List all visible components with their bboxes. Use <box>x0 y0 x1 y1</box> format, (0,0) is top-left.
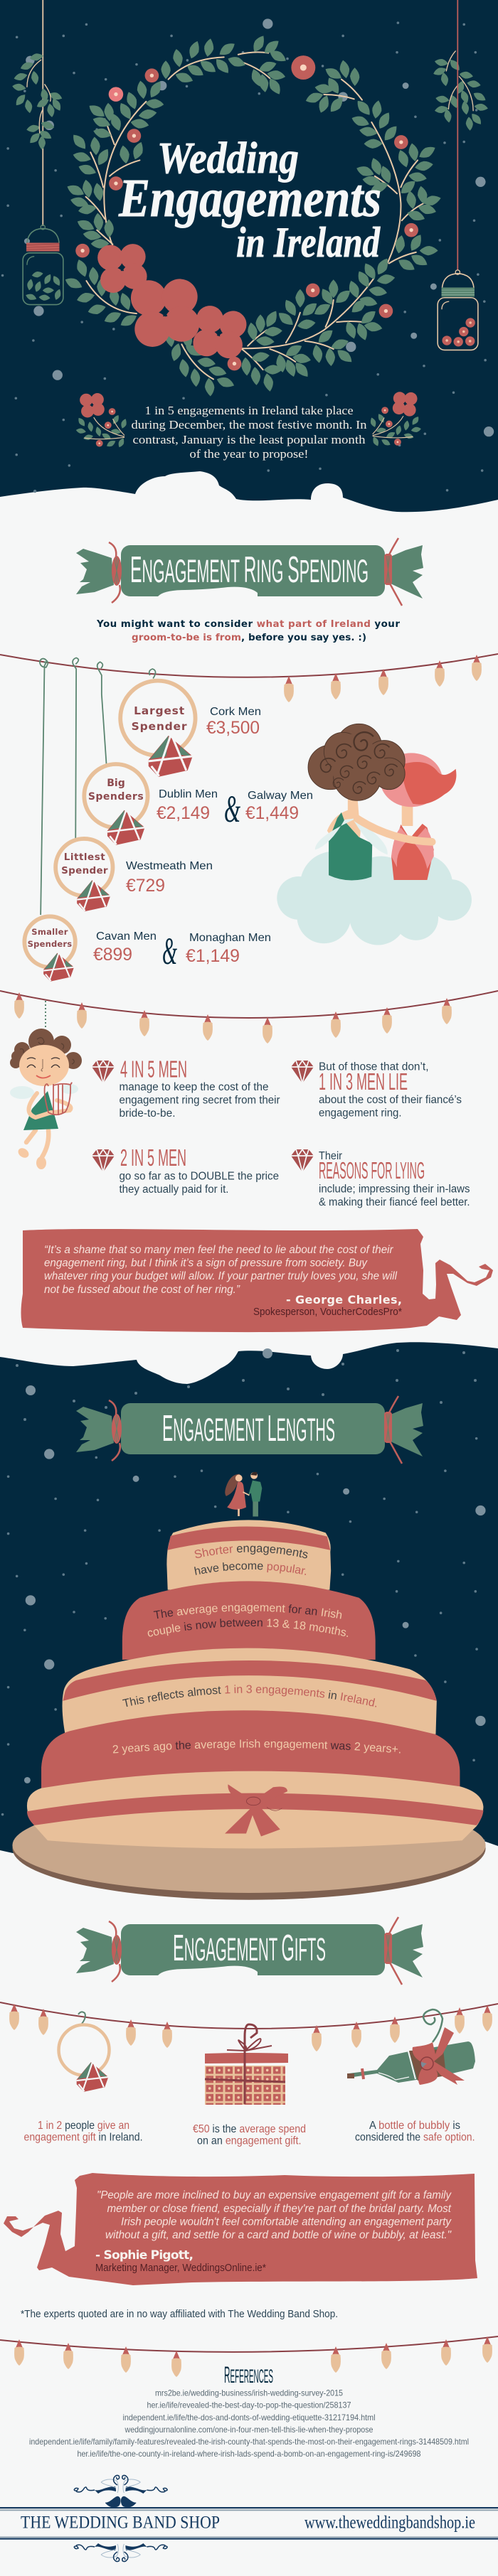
engagement gifts heading banner: ENGAGEMENT GIFTS <box>173 1928 326 1969</box>
string of lights: gifts <box>0 2002 498 2051</box>
spend figures: €729 <box>126 876 165 896</box>
spend figures: Galway Men <box>248 790 313 802</box>
snow dots: hero <box>1 18 494 493</box>
spend figures: Cavan Men <box>96 930 157 943</box>
snow dots: engagement lengths <box>1 1348 486 1842</box>
stat: 2 in 5 men: go so far as to DOUBLE the price <box>120 1170 279 1183</box>
tier labels <box>112 1545 401 1755</box>
engagement gifts heading banner <box>76 1917 423 1985</box>
stat: 4 in 5 men <box>92 1056 280 1120</box>
ring labels: Spender <box>132 720 187 733</box>
title: Wedding <box>157 134 299 183</box>
callout: George Charles quote <box>21 1229 493 1332</box>
ring labels: Largest <box>134 704 185 717</box>
right hanging jar with flowers <box>432 0 489 350</box>
ring labels: Littlest <box>64 852 105 863</box>
spend figures: Westmeath Men <box>126 860 213 872</box>
spend figures <box>93 706 313 972</box>
references: her.ie/life/revealed-the-best-day-to-pop-the-question/258137 <box>147 2400 351 2410</box>
chart: tiered wedding cake <box>12 1471 486 1900</box>
ring labels: Smaller <box>31 927 68 937</box>
spend figures: & <box>224 788 240 830</box>
callout: Sophie Pigott quote <box>4 2173 477 2285</box>
floral corner: intro right <box>369 392 421 447</box>
spend figures: & <box>162 930 177 972</box>
icon: gift box <box>205 2024 288 2105</box>
title: in Ireland <box>236 219 381 266</box>
stat: reasons for lying: include; impressing their in-laws <box>319 1183 470 1196</box>
ring labels: Spenders <box>88 791 144 803</box>
spend figures: Dublin Men <box>159 788 218 800</box>
ribbon bow <box>225 1784 287 1836</box>
engagement lengths heading banner <box>76 1396 423 1464</box>
cake board <box>12 1797 486 1900</box>
wreath with flowers <box>63 33 442 397</box>
ring labels: Spenders <box>28 939 72 949</box>
gift stat: 50 euro: on an engagement gift. <box>197 2135 302 2147</box>
callout: George Charles quote: - George Charles, <box>286 1293 402 1306</box>
tier labels: The average engagement for an Irish <box>154 1604 341 1619</box>
intro text: of the year to propose! <box>189 447 309 461</box>
gift stat: 50 euro: €50 is the average spend <box>193 2123 306 2135</box>
callout: Sophie Pigott quote: - Sophie Pigott, <box>95 2248 194 2263</box>
callout: George Charles quote: engagement ring, but I think it’s a sign of pressure from society. Buy <box>44 1257 368 1270</box>
stat: reasons for lying: Their <box>319 1150 342 1162</box>
references: independent.ie/life/the-dos-and-donts-of-wedding-etiquette-31217194.html <box>122 2413 376 2422</box>
callout: George Charles quote: not be fussed about the cost of her ring.” <box>44 1284 240 1296</box>
illustration: cupid with lyre <box>10 1001 82 1169</box>
stat: 1 in 3 men lie: 1 IN 3 MEN LIE <box>319 1068 408 1095</box>
tier 4 <box>41 1710 460 1790</box>
tier 1 <box>166 1520 331 1590</box>
gift stat: bubbly: A bottle of bubbly is <box>369 2120 460 2132</box>
intro text: 1 in 5 engagements in Ireland take place <box>145 404 353 417</box>
callout: Sophie Pigott quote: Irish people wouldn't feel comfortable attending an engagement party <box>121 2216 452 2228</box>
stat: 1 in 3 men lie: engagement ring. <box>319 1107 401 1119</box>
icon: champagne bottle with bow <box>347 2009 475 2085</box>
tier labels: Shorter engagements <box>195 1545 307 1558</box>
references: her.ie/life/the-one-county-in-ireland-where-irish-lads-spend-a-bomb-on-an-engagement-ring-is/249698 <box>77 2449 421 2459</box>
references: weddingjournalonline.com/one-in-four-men-tell-this-lie-when-they-propose <box>124 2425 374 2435</box>
gift stat: 1 in 2: engagement gift in Ireland. <box>24 2132 142 2144</box>
callout: Sophie Pigott quote: Marketing Manager, WeddingsOnline.ie* <box>95 2263 266 2274</box>
callout: George Charles quote: “It’s a shame that so many men feel the need to lie about the cost of their <box>44 1244 393 1256</box>
stat: 1 in 3 men lie <box>291 1061 462 1119</box>
gift stat: bubbly: considered the safe option. <box>355 2132 475 2144</box>
string of lights: stats <box>0 991 498 1043</box>
tier labels: have become popular. <box>194 1562 306 1575</box>
hanging ornaments <box>24 658 196 982</box>
references <box>29 2362 469 2459</box>
spend figures: Monaghan Men <box>189 932 271 944</box>
intro text: contrast, January is the least popular month <box>132 433 366 446</box>
references: mrs2be.ie/wedding-business/irish-wedding-survey-2015 <box>155 2388 343 2398</box>
stat: 4 in 5 men: engagement ring secret from their <box>120 1095 280 1106</box>
panel: engagement ring spending heading banner <box>76 538 423 606</box>
string of lights: references <box>0 2336 498 2377</box>
callout: George Charles quote: Spokesperson, VoucherCodesPro* <box>253 1306 402 1318</box>
icon: engagement ring ornament <box>58 2012 110 2092</box>
stat: 2 in 5 men <box>92 1144 279 1196</box>
floral corner: intro left <box>75 393 128 449</box>
left hanging jar with leaves <box>11 0 63 305</box>
title <box>118 134 381 266</box>
footer logo and brand <box>0 2475 498 2562</box>
intro text <box>131 404 367 461</box>
panel: engagement ring spending heading banner: ENGAGEMENT RING SPENDING <box>130 549 369 591</box>
title: Engagements <box>118 168 381 228</box>
tier 3 <box>63 1648 437 1734</box>
footer logo and brand: THE WEDDING BAND SHOP <box>21 2513 220 2533</box>
gift stat: 1 in 2 <box>24 2120 142 2144</box>
panel: hero night sky <box>0 0 498 512</box>
stat: 4 in 5 men: bride-to-be. <box>120 1107 175 1120</box>
engagement lengths heading banner: ENGAGEMENT LENGTHS <box>162 1408 335 1449</box>
gift stat: 50 euro <box>193 2123 306 2147</box>
tier 5 <box>27 1771 483 1848</box>
couple topper <box>225 1472 262 1516</box>
stat: 4 in 5 men: manage to keep the cost of the <box>120 1081 269 1093</box>
illustration: couple on a cloud <box>277 724 472 945</box>
stat: 2 in 5 men: they actually paid for it. <box>120 1184 229 1196</box>
tier 2 <box>122 1581 376 1660</box>
stat: reasons for lying <box>291 1149 470 1208</box>
callout: Sophie Pigott quote: without a gift, and settle for a card and bottle of wine or bubbly, at least." <box>105 2229 452 2241</box>
stat: 4 in 5 men: 4 IN 5 MEN <box>120 1056 187 1082</box>
ring labels: Spender <box>61 865 108 876</box>
callout: Sophie Pigott quote: member or close friend, especially if they're part of the bridal party. Most <box>107 2203 452 2215</box>
gift stat: bubbly <box>355 2120 475 2144</box>
stat: 1 in 3 men lie: But of those that don’t, <box>319 1061 428 1073</box>
stat: reasons for lying: & making their fiancé feel better. <box>319 1196 470 1208</box>
tier labels: This reflects almost 1 in 3 engagements in Ireland. <box>122 1685 376 1707</box>
tier labels: couple is now between 13 & 18 months. <box>148 1619 348 1637</box>
stat: 1 in 3 men lie: about the cost of their fiancé’s <box>319 1094 462 1106</box>
spend figures: €1,449 <box>245 803 299 823</box>
intro sentence: ring spending: groom-to-be is from, before you say yes. :) <box>132 632 366 643</box>
callout: Sophie Pigott quote: "People are more inclined to buy an expensive engagement gift for a family <box>97 2189 452 2201</box>
intro sentence: ring spending <box>96 618 400 643</box>
spend figures: €2,149 <box>157 803 210 823</box>
ring labels: Big <box>107 778 125 789</box>
intro text: during December, the most festive month. In <box>131 418 367 431</box>
spend figures: €1,149 <box>186 946 240 966</box>
spend figures: Cork Men <box>210 706 261 718</box>
tier labels: 2 years ago the average Irish engagement was 2 years+. <box>112 1739 401 1755</box>
string of lights: ring spending <box>0 654 498 702</box>
spend figures: €899 <box>93 945 132 965</box>
panel: engagement lengths night sky <box>0 1342 498 1853</box>
references: REFERENCES <box>224 2362 273 2388</box>
gift stat: 1 in 2: 1 in 2 people give an <box>38 2120 129 2132</box>
intro sentence: ring spending: You might want to consider what part of Ireland your <box>96 618 400 630</box>
callout: George Charles quote: whatever ring your budget will allow. If your partner truly loves you, she will <box>44 1270 398 1282</box>
stat: 2 in 5 men: 2 IN 5 MEN <box>120 1144 186 1171</box>
ring labels <box>28 704 187 949</box>
footnote: *The experts quoted are in no way affiliated with The Wedding Band Shop. <box>21 2308 338 2320</box>
spend figures: €3,500 <box>206 718 260 738</box>
